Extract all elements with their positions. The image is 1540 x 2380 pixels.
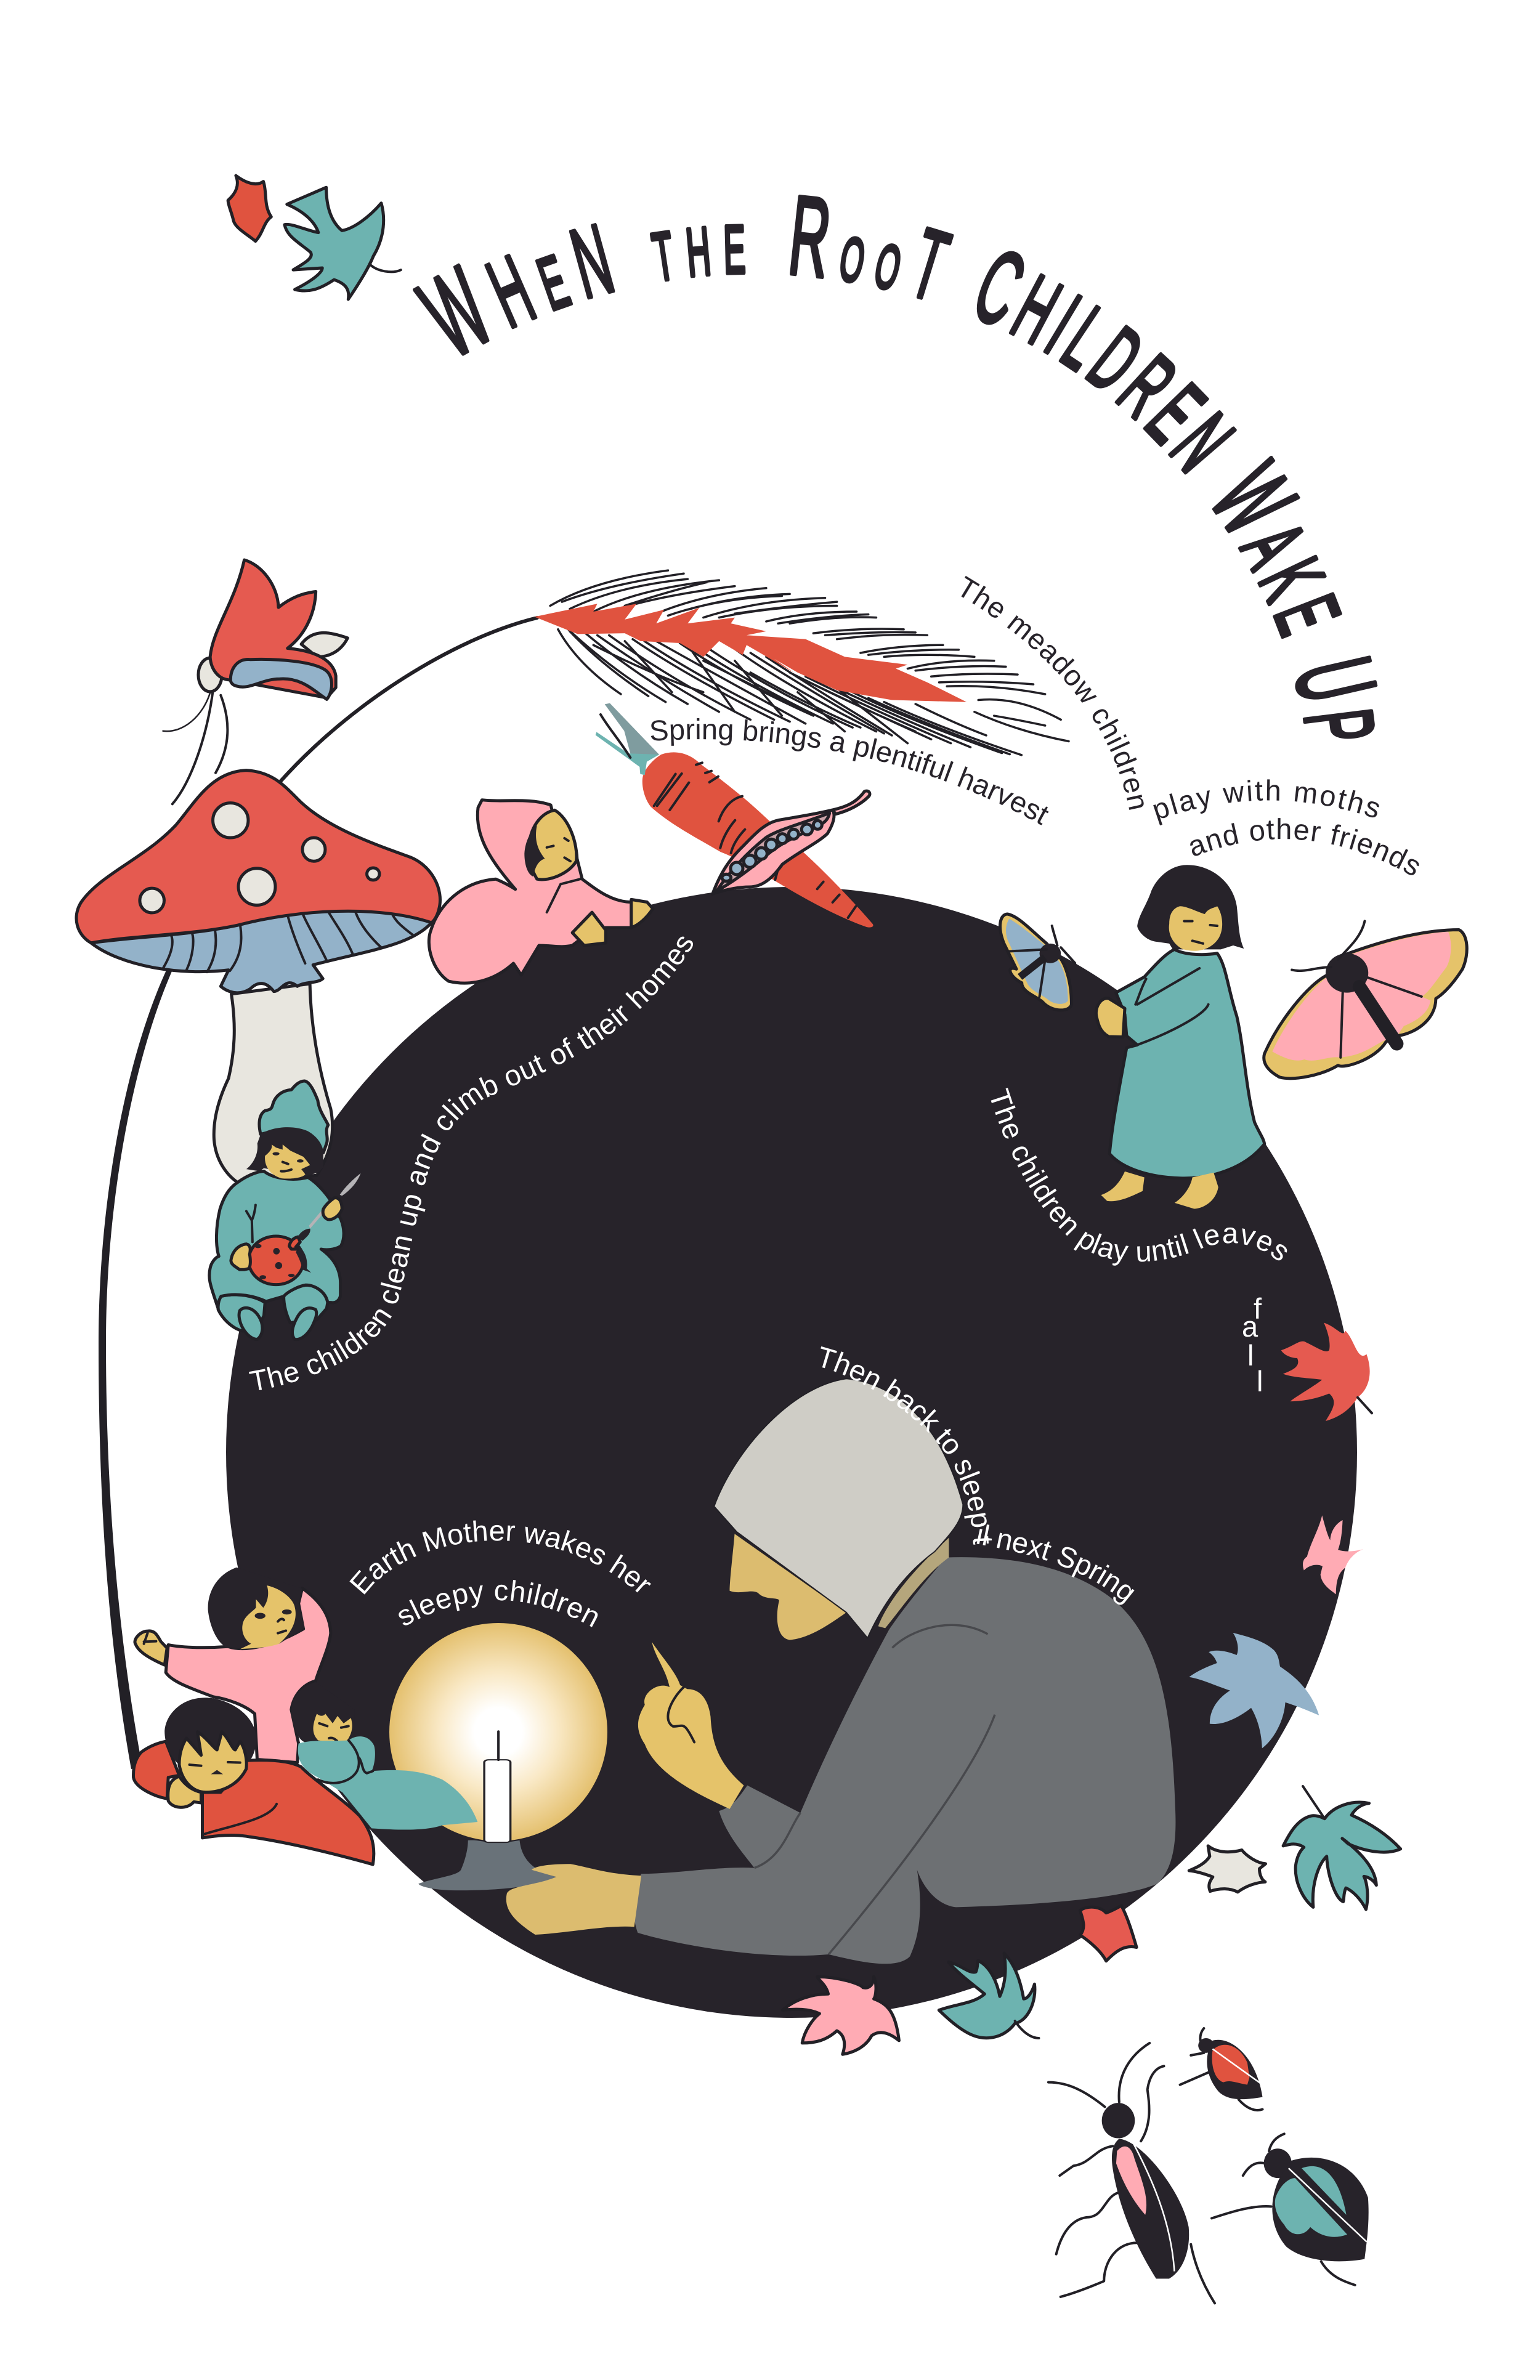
top leaves: red and teal bbox=[228, 176, 401, 299]
carrot and pea pod bbox=[596, 703, 873, 928]
falling leaves right side bbox=[1189, 1515, 1401, 1909]
child in teal holding ladybird bbox=[209, 1081, 361, 1340]
bonnet bbox=[714, 1378, 963, 1638]
falling leaves bottom bbox=[782, 1906, 1137, 2054]
teal child sleeping bbox=[291, 1682, 477, 1830]
dark earth circle bbox=[226, 887, 1357, 2018]
collar bbox=[878, 1538, 949, 1628]
grey robe bbox=[634, 1557, 1175, 1964]
text: climb out of homes: The children clean up and climb out of their homes bbox=[249, 936, 694, 1390]
text: play with moths: play with moths bbox=[1153, 779, 1379, 825]
sleepy children group bbox=[134, 1568, 477, 1864]
text: back to sleep: Then back to sleep til next Spring bbox=[821, 1346, 1135, 1605]
wheat feather with bristles bbox=[535, 570, 1069, 755]
child in teal dress with moths bbox=[1096, 865, 1265, 1208]
pink child waking bbox=[135, 1568, 331, 1763]
candle and holder bbox=[418, 1731, 556, 1890]
candle glow bbox=[389, 1623, 607, 1841]
text: meadow children: The meadow children bbox=[961, 575, 1144, 810]
red leaf beside fall bbox=[1281, 1323, 1372, 1421]
Earth Mother figure bbox=[418, 1378, 1175, 1964]
face bbox=[729, 1534, 846, 1640]
child in pink hood bbox=[429, 800, 653, 983]
text: other friends: and other friends bbox=[1190, 818, 1419, 875]
text: fall: fall bbox=[1242, 1292, 1263, 1398]
hand holding candle bbox=[506, 1864, 641, 1935]
mushroom bbox=[76, 771, 440, 1183]
pointing hand bbox=[638, 1642, 744, 1809]
beetle: large pink bbox=[1048, 2043, 1215, 2303]
beetle: small red bbox=[1180, 2028, 1263, 2110]
pink moth bbox=[1264, 921, 1467, 1079]
grass stalk curve bbox=[99, 618, 537, 1769]
red child sleeping bbox=[134, 1698, 374, 1864]
text: earth mother wakes: Earth Mother wakes her bbox=[349, 1520, 651, 1595]
text: sleepy children: sleepy children bbox=[399, 1580, 598, 1627]
text: play until leaves: The children play until leaves bbox=[991, 1088, 1287, 1266]
blue moth bbox=[1000, 914, 1075, 1010]
flower bbox=[163, 560, 347, 804]
beetle: teal bbox=[1212, 2134, 1369, 2285]
title: WHEN THE ROOT CHILDREN WAKE UP bbox=[413, 195, 1377, 739]
text: spring harvest: Spring brings a plentiful harvest bbox=[650, 718, 1048, 825]
